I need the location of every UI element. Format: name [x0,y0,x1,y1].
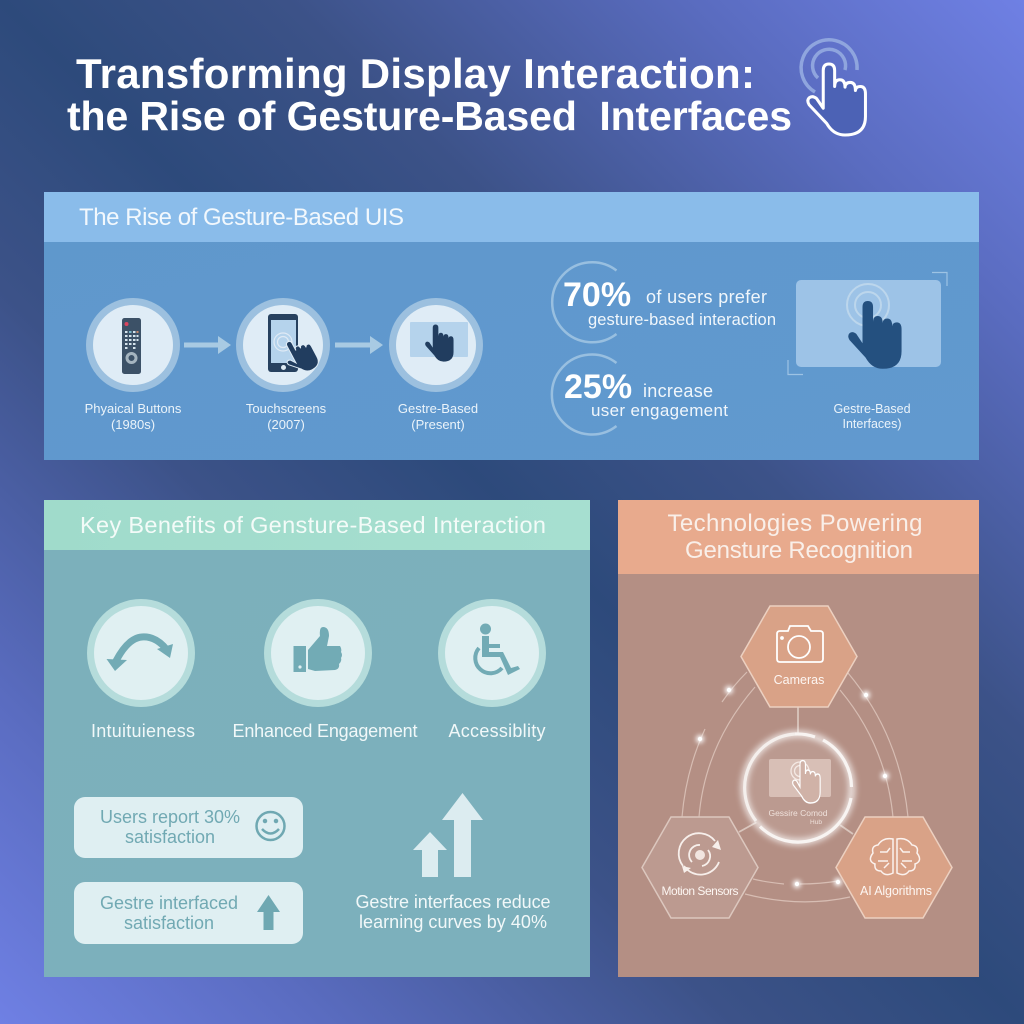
title: Transforming Display Interaction: [76,50,755,97]
stat: 70 percent: 70% [563,276,631,314]
title [67,50,792,139]
timeline: gesture-based [389,298,483,432]
heading: technologies [668,510,922,564]
hub: gesture control: Hub [810,819,822,826]
hexagon: cameras: Cameras [774,673,824,687]
timeline: gesture-based: Gestre-Based [398,401,478,416]
text: learning curves: Gestre interfaces reduce [356,892,550,912]
timeline: touchscreens: (2007) [267,417,305,432]
hub: gesture control: Gessire Comod [768,808,828,818]
icon: brain [870,839,920,875]
panel header [44,500,590,550]
panel: key benefits [44,500,590,977]
icon: camera [777,626,823,662]
benefit: accessibility: Accessiblity [448,721,546,741]
stat: 70 percent: gesture-based interaction [588,311,776,329]
stat: 25 percent: increase [643,381,713,401]
text: learning curves: learning curves by 40% [359,912,547,932]
callout: gesture interfaces: satisfaction [124,913,214,933]
timeline: physical buttons [85,298,182,432]
stat: 25 percent: 25% [564,368,632,406]
icon: up arrow [257,895,280,930]
icon: motion [679,833,721,875]
timeline: gesture-based: (Present) [411,417,465,432]
hexagon: motion sensors: Motion Sensors [662,884,738,898]
callout: gesture interfaces: Gestre interfaced [100,893,238,913]
stat: 25 percent: user engagement [591,401,728,420]
benefit: intuitiveness [87,599,195,741]
panel header [618,500,979,574]
panel: technologies [618,500,979,977]
timeline: physical buttons: (1980s) [111,417,155,432]
timeline: touchscreens [236,298,330,432]
heading: benefits: Key Benefits of Gensture-Based Interaction [80,512,546,538]
hub: gesture control [744,734,852,842]
stat: 70 percent [552,262,776,342]
heading: technologies: Technologies Powering [668,510,922,537]
timeline: touchscreens: Touchscreens [246,401,327,416]
arrow [184,336,231,354]
hub ring [745,734,852,842]
callout: satisfaction: Users report 30% [100,807,240,827]
illustration: gesture screen: Gestre-Based [833,402,911,416]
hexagon: AI algorithms: AI Algorithms [860,884,932,898]
panel: the rise of gesture-based UIs [44,192,979,460]
panel header [44,192,979,242]
heading: rise: The Rise of Gesture-Based UIS [79,204,404,231]
hexagon: AI algorithms [836,817,952,918]
callout: gesture interfaces [74,882,303,944]
callout: satisfaction: satisfaction [125,827,215,847]
arrow [335,336,383,354]
benefit: accessibility [438,599,546,741]
illustration: gesture screen [788,272,947,431]
illustration: gesture screen: Interfaces) [842,417,902,431]
benefit: intuitiveness: Intuituieness [91,721,195,741]
benefit: enhanced engagement [232,599,418,741]
hexagon: motion sensors [642,817,758,918]
stat: 25 percent [552,355,728,435]
orbit dots [696,686,889,888]
title: the Rise of Gesture-Based Interfaces [67,93,792,139]
text: learning curves [356,892,550,932]
callout: satisfaction [74,797,303,858]
heading: technologies: Gensture Recognition [685,537,913,564]
orbit lines [682,672,908,902]
timeline: physical buttons: Phyaical Buttons [85,401,182,416]
icon: tapping hand [801,40,865,135]
icon: smiley [256,812,284,840]
benefit: enhanced engagement: Enhanced Engagement [232,721,418,741]
icon: growth arrows [413,793,483,877]
hexagon: cameras [741,606,857,707]
stat: 70 percent: of users prefer [646,287,767,307]
